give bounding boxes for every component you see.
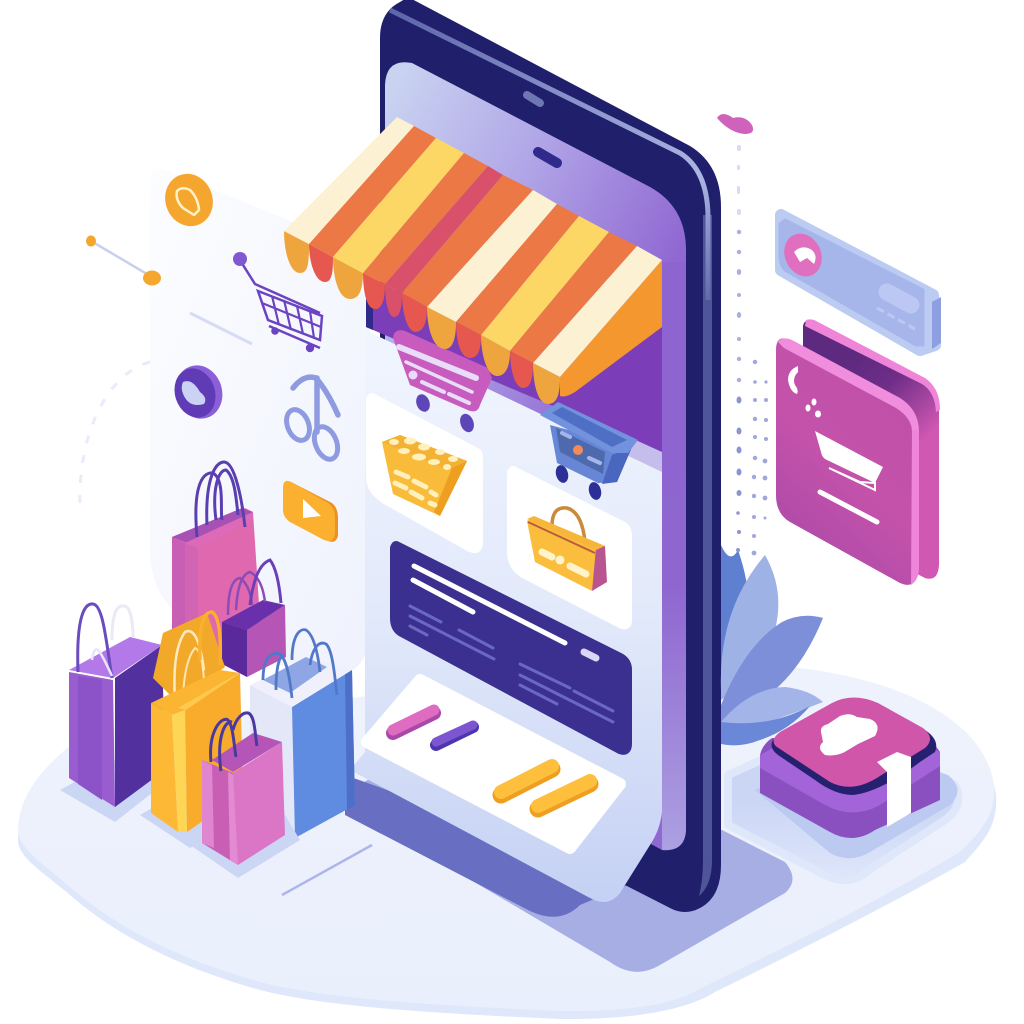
platform base	[18, 655, 996, 1019]
wallet back panel	[803, 321, 939, 579]
amber pill two	[538, 781, 590, 809]
pink heart marker	[717, 114, 753, 134]
connector with orange dots	[86, 236, 161, 286]
leaf back	[721, 545, 749, 690]
pink wallet	[776, 319, 940, 585]
icon: purple coin	[168, 359, 229, 425]
plant	[721, 545, 823, 745]
leaf bottom	[721, 706, 810, 745]
icon: orange chat badge	[158, 167, 220, 233]
phone body	[380, 0, 721, 912]
bottom product card	[367, 680, 620, 848]
large pink shopping bag	[172, 462, 262, 650]
awning	[284, 117, 662, 404]
pink pill	[393, 710, 434, 733]
product card right	[511, 470, 628, 625]
awning side face	[560, 260, 662, 396]
product card left	[370, 397, 479, 549]
leaf lower light	[721, 687, 823, 735]
blue payment card	[777, 215, 941, 350]
blue shopping bag	[250, 630, 355, 838]
icon: yellow basket	[382, 435, 467, 516]
purple shopping bag	[60, 604, 175, 822]
small pink shopping bag	[190, 713, 300, 878]
awning scallops	[284, 231, 560, 404]
dashed arc	[80, 362, 150, 505]
dotted vertical trails	[736, 145, 768, 555]
leaf tall	[721, 555, 778, 700]
phone floor shadow	[335, 760, 792, 972]
pink cart	[393, 330, 492, 434]
divider line	[190, 313, 252, 344]
ghost background panel	[150, 168, 370, 677]
icon: purple shopping cart outline	[233, 252, 322, 352]
dark info panel	[395, 546, 627, 750]
icon: play tile	[283, 481, 338, 542]
storefront interior	[366, 290, 662, 474]
icon: yellow handbag	[527, 508, 607, 591]
phone screen	[385, 62, 686, 850]
leaf right	[721, 616, 823, 722]
gift box pedestal	[728, 720, 958, 880]
awning stripes	[284, 117, 662, 377]
dark purple shopping bag	[222, 560, 286, 677]
wallet icons	[788, 366, 883, 490]
yellow shopping bag	[140, 612, 260, 848]
ground line	[282, 845, 372, 895]
gift box	[760, 698, 940, 838]
wallet front panel	[776, 338, 919, 585]
purple pill	[436, 725, 473, 745]
icon: periwinkle scissors	[282, 377, 342, 463]
screen content sheet	[350, 330, 662, 902]
amber pill one	[501, 766, 552, 795]
blue cart	[540, 402, 638, 501]
